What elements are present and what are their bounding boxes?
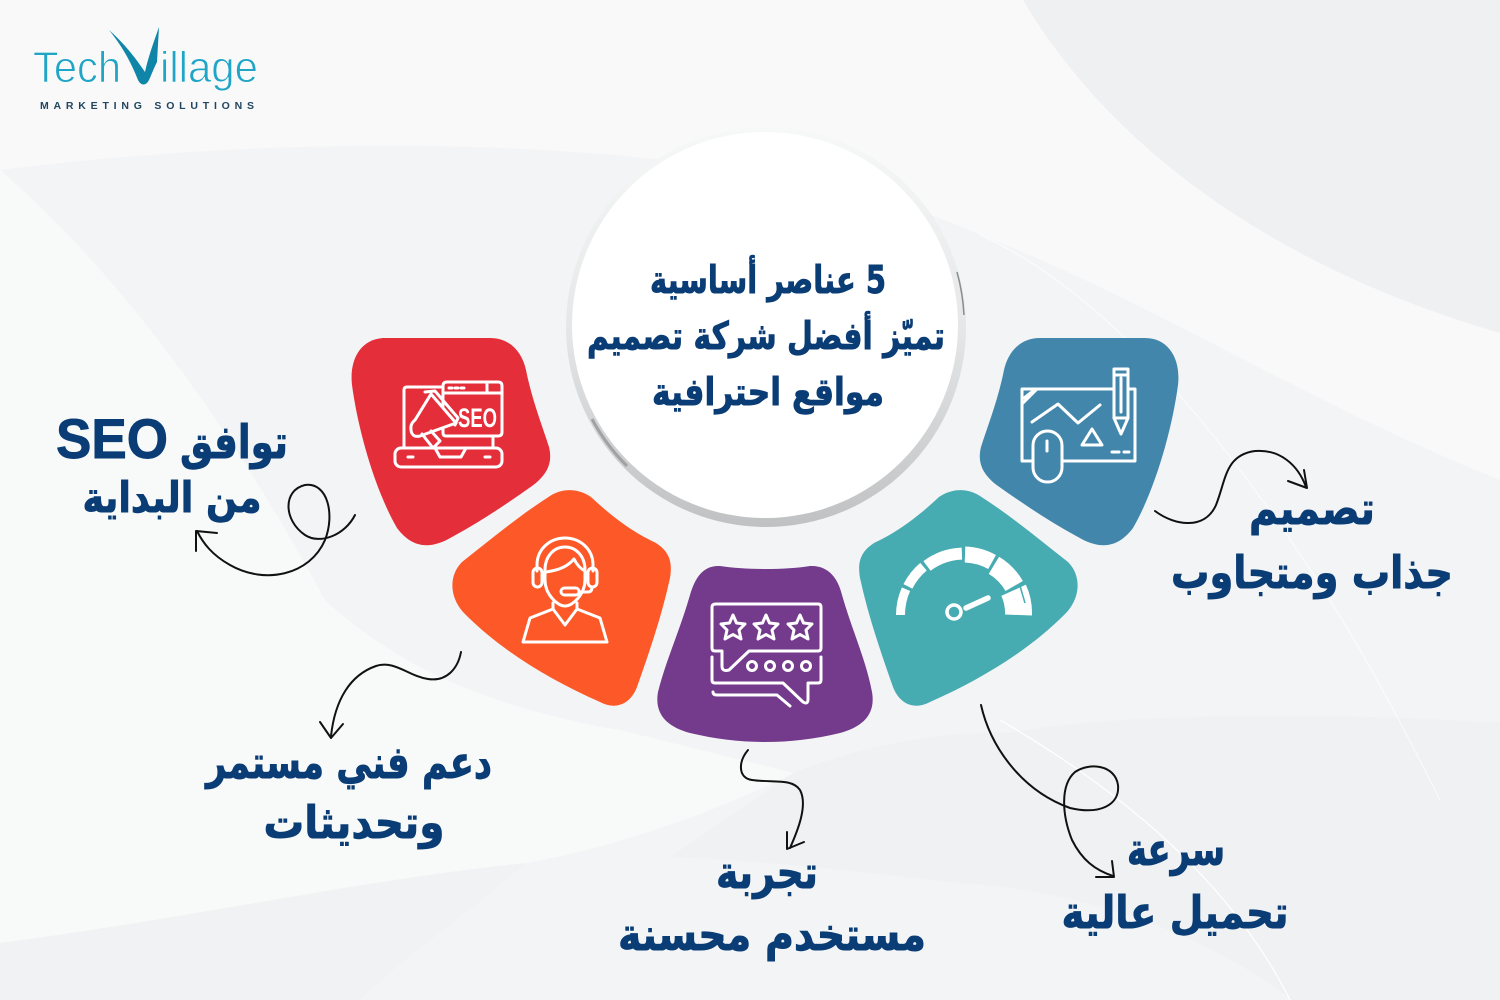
label: improved user experience (618, 846, 926, 961)
label: improved user experience: مستخدم محسنة (618, 908, 926, 961)
label: SEO compatibility (56, 407, 288, 523)
red blob (352, 338, 550, 545)
icon: design board, pencil and mouse (1022, 369, 1135, 482)
icon: SEO laptop and megaphone (395, 382, 502, 467)
circle ring (566, 127, 966, 527)
panel: speed (859, 490, 1078, 706)
panel: design (980, 338, 1178, 545)
blue blob (980, 338, 1178, 545)
circle shadow left (592, 419, 627, 466)
title text: مواقع احترافية (652, 370, 884, 414)
logo word: Tech: Tech (33, 43, 121, 92)
label: high loading speed (1062, 823, 1288, 939)
panel: SEO (352, 338, 550, 545)
label: SEO compatibility: توافق (180, 415, 288, 469)
arrow: SEO (196, 485, 355, 575)
logo mark: V swoosh (109, 27, 159, 84)
panel: user experience (657, 566, 873, 742)
label: responsive design: جذاب ومتجاوب (1171, 546, 1453, 599)
label: technical support: وتحديثات (264, 796, 444, 849)
orange blob (452, 490, 671, 706)
label: technical support: دعم فني مستمر (204, 736, 492, 789)
arrow: user experience (741, 750, 804, 849)
teal blob (859, 490, 1078, 706)
icon label: SEO: SEO (458, 403, 497, 433)
circle shadow right (957, 272, 964, 315)
logo word: illage: illage (160, 43, 258, 92)
title text: 5 عناصر أساسية (650, 255, 886, 302)
circle face (572, 132, 958, 518)
logo tagline: MARKETING SOLUTIONS (40, 100, 254, 112)
title text: تميّز أفضل شركة تصميم (587, 311, 945, 359)
logo: Tech Village (33, 27, 258, 112)
label: responsive design: تصميم (1249, 482, 1375, 535)
arrow: speed (981, 705, 1118, 877)
title text (587, 255, 945, 414)
purple blob (657, 566, 873, 742)
label: high loading speed: سرعة (1127, 823, 1225, 876)
arrow: design (1155, 451, 1307, 523)
label: high loading speed: تحميل عالية (1062, 886, 1288, 939)
label: technical support (204, 736, 492, 849)
label: SEO compatibility: SEO (56, 407, 168, 470)
label: SEO compatibility: من البداية (82, 473, 262, 523)
icon: speedometer (900, 554, 1025, 619)
central circle with title (566, 127, 966, 527)
label: improved user experience: تجربة (716, 846, 818, 899)
icon: agent with headset (523, 538, 607, 642)
icon: rating chat bubbles (712, 604, 821, 706)
label: responsive design (1171, 482, 1453, 599)
panel: support (452, 490, 671, 706)
arrow: support (320, 652, 461, 738)
